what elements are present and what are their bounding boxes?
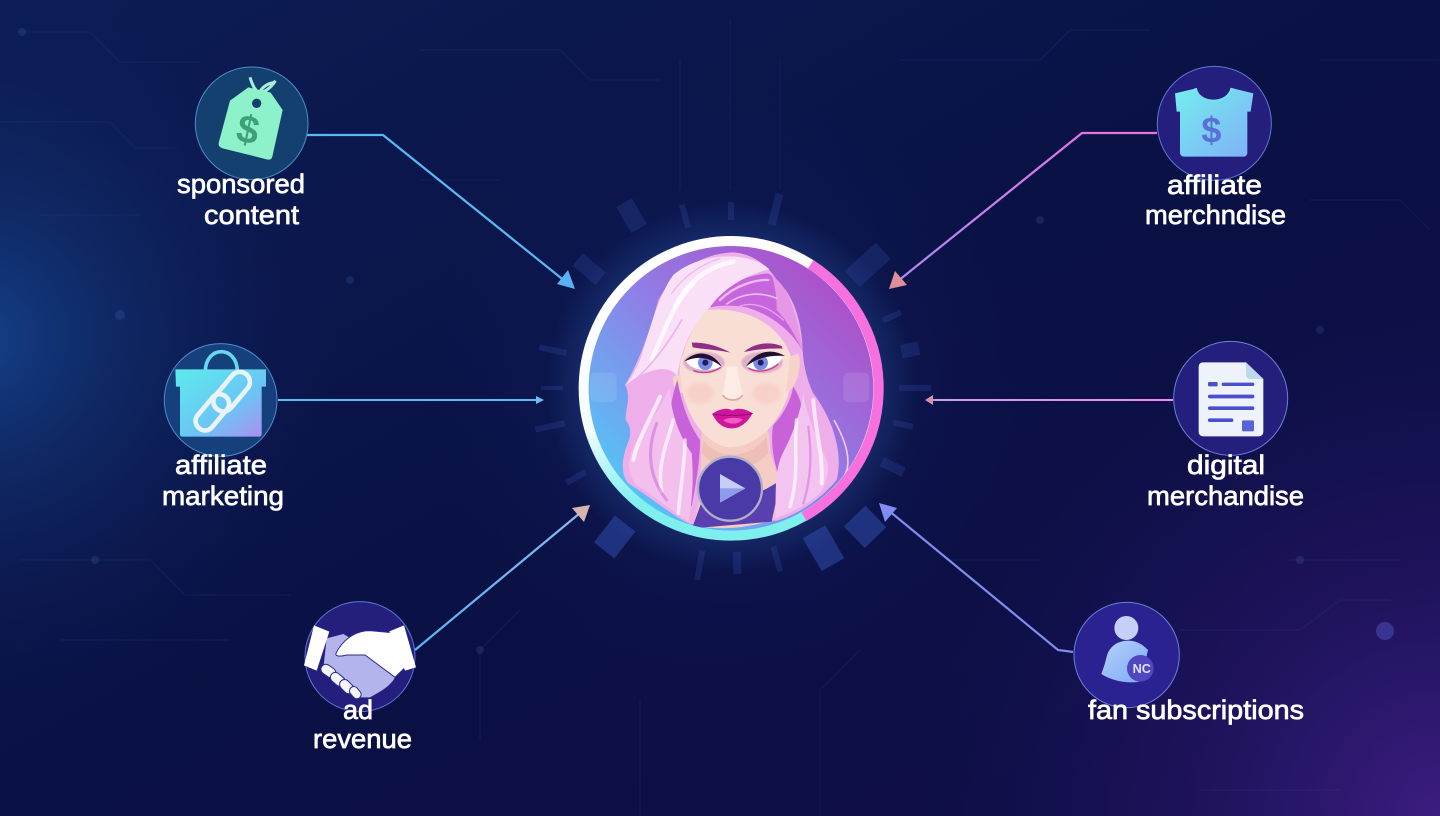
node: affiliate marketing [162,344,284,511]
label: affiliate marketing [162,450,284,511]
face [680,310,792,447]
ring: pink arc [804,264,879,517]
icon: handshake [304,602,416,712]
label: sponsored content: sponsored [177,169,305,199]
label: sponsored content: content [204,200,300,230]
portrait background disc [584,242,878,535]
node: digital merchandise [1147,341,1304,511]
node: sponsored content [177,67,308,230]
play button [698,457,762,521]
inner hair shadow right [772,386,801,472]
arrow: ad revenue to creator [415,505,590,650]
eyebrows [692,343,783,353]
lips [712,409,753,428]
label: affiliate merchandise [1145,170,1286,230]
arrow: digital merchandise to creator [925,395,1173,405]
label: ad revenue [313,695,412,754]
node: fan subscriptions [1074,602,1304,725]
thin right strand [834,420,848,487]
neck [693,430,780,528]
label: digital merchandise: merchandise [1147,481,1304,511]
icon: fan profile with badge: NC [1133,662,1151,676]
faded side icons [590,373,869,402]
icon: price tag: $ [233,106,263,154]
nose [723,367,743,400]
icon: document [1174,341,1288,455]
icon: fan profile with badge [1074,602,1179,708]
ears [673,353,800,393]
ring: white and cyan arc [584,241,878,536]
label: digital merchandise: digital [1187,450,1265,480]
icon: price tag [195,67,308,180]
icon: t-shirt with dollar: $ [1201,109,1221,150]
label: sponsored content [177,169,305,230]
arrow: affiliate marketing to creator [278,396,544,404]
hair base [623,252,839,524]
label: affiliate marketing: marketing [162,481,284,511]
front swept light lock [625,256,769,386]
label: ad revenue: revenue [313,724,412,754]
label: ad revenue: ad [343,695,373,725]
label: affiliate merchandise: merchndise [1145,200,1286,230]
creator portrait [584,241,879,536]
label: fan subscriptions: fan subscriptions [1088,695,1304,725]
node: ad revenue [304,602,416,754]
label: affiliate marketing: affiliate [175,450,267,480]
lower right waves [775,393,828,518]
top swept purple section [710,273,803,352]
node: affiliate merchandise [1145,66,1286,230]
illustrated woman [623,252,848,528]
icon: shopping bag with chain link [164,344,277,456]
inner hair shadow left [670,380,700,507]
hair strands [633,258,822,513]
icon: t-shirt with dollar [1157,66,1271,180]
radial ticks around portrait [535,193,931,581]
eyes [683,352,785,373]
label: digital merchandise [1147,450,1304,511]
arrow: affiliate merchandise to creator [889,133,1157,289]
lower left waves [629,387,693,522]
shirt [693,483,776,528]
label: affiliate merchandise: affiliate [1167,170,1262,200]
arrow: fan subscriptions to creator [879,503,1073,652]
arrow: sponsored content to creator [307,135,575,289]
